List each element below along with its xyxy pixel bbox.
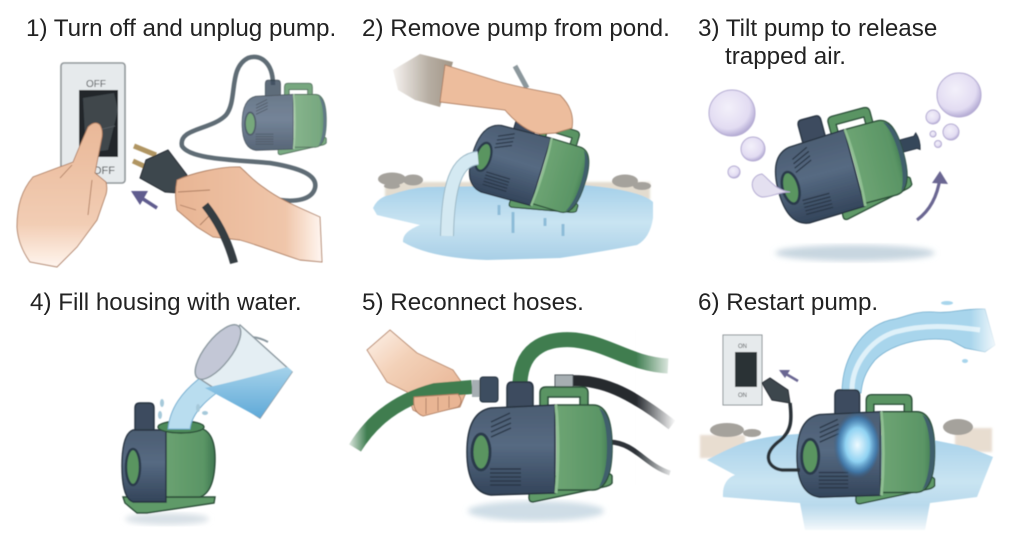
shadow [775, 245, 935, 261]
icon: pump [467, 382, 612, 502]
fingers [414, 394, 461, 416]
bubbles [709, 73, 981, 178]
icon: wall switch: OFF [86, 79, 106, 90]
icon: black power cord [205, 205, 234, 263]
pond fade [790, 505, 940, 533]
ground [385, 182, 650, 200]
icon: faded pump with cord [182, 57, 326, 201]
icon: hand [367, 330, 467, 415]
icon: wall switch: ON [738, 344, 747, 350]
pond [707, 433, 993, 530]
icon: pouring water stream [447, 158, 478, 236]
title: step 5: 5) Reconnect hoses. [362, 289, 584, 316]
icon: bucket [187, 318, 292, 418]
icon: wall switch: OFF [93, 165, 115, 177]
icon: wall switch [61, 63, 125, 183]
water drips [499, 205, 563, 236]
icon: hose connector [472, 377, 498, 402]
panel: step 5 illustration [345, 330, 676, 521]
panel: step 4 illustration [122, 318, 292, 525]
icon: plug and cord [762, 378, 800, 470]
arrow: towards switch [779, 370, 798, 381]
rocks [710, 419, 973, 437]
air puff [752, 174, 790, 197]
panel: step 1 illustration [17, 57, 326, 267]
title: step 3: trapped air. [725, 43, 846, 70]
icon: top green hose [520, 340, 668, 382]
title: step 6: 6) Restart pump. [698, 289, 878, 316]
shadow [125, 513, 209, 525]
panel: step 3 illustration [709, 73, 981, 261]
panel: step 6 illustration [700, 300, 1000, 533]
ground [700, 428, 992, 458]
icon: left hand pressing switch [17, 123, 107, 267]
title: step 1: 1) Turn off and unplug pump. [26, 15, 336, 42]
title: step 2: 2) Remove pump from pond. [362, 15, 670, 42]
icon: glow [831, 411, 879, 479]
panel: step 2 illustration [373, 54, 653, 260]
pond water [373, 185, 653, 260]
icon: water stream [168, 378, 228, 429]
shadow [468, 501, 604, 521]
arrow: upward curve [917, 178, 940, 220]
icon: cord [610, 442, 670, 473]
icon: pump lifted from pond [461, 100, 600, 226]
icon: left hose [355, 387, 472, 448]
arm and hand lifting pump [393, 54, 572, 134]
icon: black hose [565, 381, 672, 425]
water droplets [158, 399, 208, 419]
icon: water spray [842, 300, 1000, 393]
icon: wall switch: ON [738, 393, 747, 399]
back cord [515, 66, 527, 88]
icon: tilted pump [762, 92, 934, 235]
arrow: towards socket [140, 197, 157, 208]
rocks [378, 172, 651, 190]
icon: right hand holding plug [176, 167, 322, 262]
icon: pump with open housing [122, 403, 215, 513]
title: step 3 [698, 15, 937, 70]
title: step 4: 4) Fill housing with water. [30, 289, 302, 316]
icon: plug [133, 146, 187, 193]
metal collar [555, 375, 573, 387]
icon: wall switch [723, 335, 762, 405]
title: step 3: 3) Tilt pump to release [698, 15, 937, 42]
icon: pump running [797, 390, 935, 504]
hose end fades [345, 330, 676, 485]
